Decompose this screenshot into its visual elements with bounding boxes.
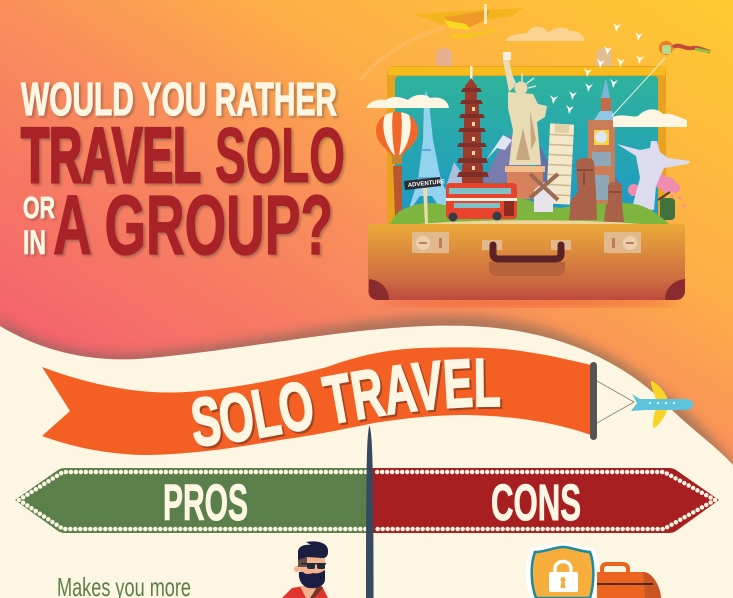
- signpost pole: [366, 425, 374, 598]
- banner title: SOLO TRAVEL: [192, 358, 502, 448]
- landmark: pagoda: [457, 66, 489, 183]
- strap: [310, 586, 323, 598]
- neck: [300, 586, 317, 598]
- windmill: [530, 174, 558, 212]
- title: [21, 73, 345, 272]
- hair side: [298, 556, 307, 567]
- cons dotted border: [374, 472, 715, 529]
- mountains: [440, 132, 622, 205]
- hair: [298, 541, 328, 560]
- cons arrow: [370, 468, 719, 533]
- tow ropes: [597, 381, 634, 423]
- red double decker bus: [446, 183, 517, 222]
- suitcase body: [368, 224, 685, 300]
- zipper: [597, 583, 653, 585]
- landmark: leaning tower of pisa: [546, 123, 574, 205]
- corner protectors: [369, 279, 685, 300]
- moai statues: [569, 158, 624, 222]
- icon: small plane: [631, 381, 694, 428]
- adventure signpost: ADVENTURE: [408, 179, 445, 189]
- green ground: [389, 198, 670, 225]
- icon: security shield: [526, 543, 599, 598]
- landmark: statue of liberty: [503, 52, 547, 199]
- banner: solo travel: [42, 347, 694, 455]
- ear: [294, 566, 300, 572]
- adventure signpost: [404, 177, 445, 224]
- balloon rope: [393, 166, 402, 216]
- shirt: [282, 586, 328, 598]
- ground glow below suitcase: [380, 297, 680, 307]
- title word: or: OR: [23, 190, 55, 225]
- shield halo: [526, 543, 599, 598]
- pros arrow shape: [15, 468, 370, 533]
- landmark: christ the redeemer: [617, 141, 690, 210]
- cloud: right: [613, 109, 687, 127]
- padlock: [549, 562, 578, 592]
- icon: hot air balloon: [376, 112, 418, 164]
- plane trail: [360, 28, 445, 80]
- face: [300, 556, 325, 580]
- lid inner teal: [395, 76, 658, 226]
- handle mounts: [482, 240, 571, 250]
- title word: solo: SOLO: [215, 111, 345, 199]
- cherry tree: [628, 174, 686, 220]
- cloud: left: [366, 95, 449, 108]
- bag handle: [602, 564, 628, 572]
- bag side: [643, 572, 661, 598]
- pros dotted border: [19, 472, 368, 529]
- cloud: top: [505, 27, 585, 41]
- handle shadow: [489, 262, 565, 276]
- suitcase handle: [493, 245, 561, 259]
- icon: orange bag: [597, 564, 661, 598]
- banner ribbon: [42, 347, 591, 455]
- banner pole: [590, 362, 597, 440]
- cons arrow shape: [370, 468, 719, 533]
- lid top band: [388, 67, 665, 75]
- suitcase clasps top: [436, 48, 612, 66]
- cream content panel: [0, 326, 733, 598]
- dragon kite: [612, 41, 710, 116]
- shield: [532, 547, 593, 598]
- sunglasses: [301, 563, 326, 569]
- landmark: big ben: [588, 78, 616, 204]
- pros arrow: [15, 468, 370, 533]
- title words: a group: A GROUP?: [53, 178, 333, 272]
- wave shadow: [0, 316, 733, 598]
- title word: in: IN: [23, 224, 46, 262]
- illustration: suitcase with landmarks: [360, 4, 710, 307]
- pros label: PROS: [163, 474, 248, 531]
- cons label: CONS: [491, 474, 581, 531]
- suitcase lid: [387, 66, 666, 225]
- latches: [412, 232, 641, 253]
- title word: travel: TRAVEL: [21, 111, 201, 199]
- beard: [299, 570, 325, 588]
- birds: [550, 23, 644, 114]
- icon: bearded man: [282, 541, 328, 598]
- icon: yellow plane: [412, 4, 523, 38]
- title line 1: WOULD YOU RATHER: [21, 73, 337, 125]
- landmark: eiffel tower: [410, 90, 452, 210]
- banner curve: [194, 406, 503, 446]
- bag body: [597, 572, 661, 598]
- body rim: [420, 220, 640, 224]
